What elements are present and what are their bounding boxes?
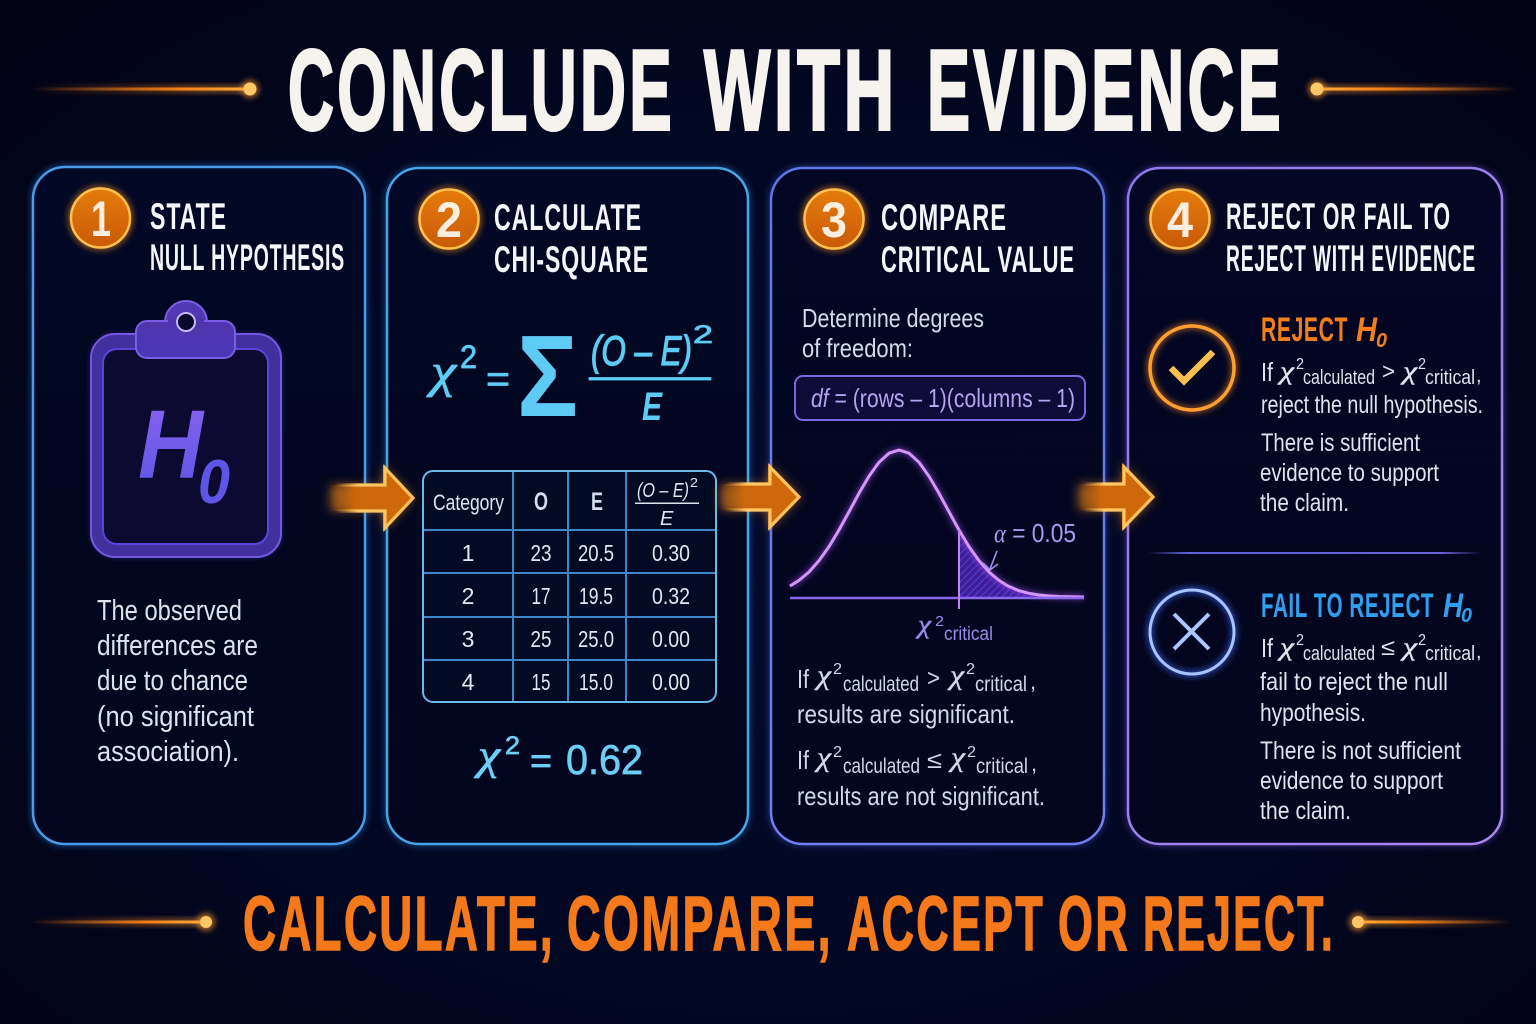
table rows: 25 bbox=[530, 626, 552, 652]
title decoration: left line bbox=[30, 80, 259, 98]
reject heading: REJECT bbox=[1261, 311, 1348, 349]
reject condition: 2 bbox=[1296, 356, 1304, 373]
table rows: 25.0 bbox=[578, 626, 614, 652]
fail to reject condition: critical bbox=[1425, 643, 1475, 665]
fail to reject condition: χ bbox=[1400, 634, 1418, 661]
fail to reject condition: calculated bbox=[1303, 643, 1375, 665]
chi-square table bbox=[423, 471, 716, 702]
footer tagline: CALCULATE, bbox=[243, 881, 555, 967]
fail to reject evidence text: evidence to support bbox=[1260, 767, 1443, 795]
chi-square formula: χ bbox=[426, 345, 458, 398]
table rows: 0.00 bbox=[652, 669, 690, 695]
reject condition: If bbox=[1261, 357, 1274, 387]
step 1 heading: NULL HYPOTHESIS bbox=[150, 237, 345, 278]
fail to reject heading: H bbox=[1443, 587, 1464, 625]
table rows: 2 bbox=[462, 583, 474, 609]
fail to reject condition: 2 bbox=[1418, 632, 1426, 649]
title bbox=[288, 28, 1284, 154]
icon: check mark bbox=[1150, 326, 1234, 410]
chi-square result: 0.62 bbox=[566, 736, 643, 783]
footer tagline: REJECT. bbox=[1143, 881, 1335, 967]
chi-square formula: 2 bbox=[693, 321, 713, 349]
table rows: 3 bbox=[462, 626, 474, 652]
df formula box bbox=[795, 376, 1085, 420]
table rows: 15.0 bbox=[579, 669, 613, 695]
fail to reject condition: fail to reject the null bbox=[1260, 668, 1448, 696]
icon: clipboard with H0: H bbox=[138, 390, 205, 499]
step 1 badge: 1 bbox=[91, 191, 111, 247]
footer tagline: ACCEPT bbox=[847, 881, 1045, 967]
significance rule: greater: 2 bbox=[966, 661, 975, 678]
icon: x mark bbox=[1150, 590, 1234, 674]
fail to reject condition: hypothesis. bbox=[1260, 699, 1366, 727]
reject heading: H bbox=[1356, 311, 1378, 349]
icon: clipboard with H0 bbox=[91, 301, 281, 557]
significance rule: less or equal: If bbox=[797, 745, 810, 775]
degrees of freedom text: of freedom: bbox=[802, 333, 913, 363]
footer decoration: left line bbox=[30, 913, 215, 931]
reject heading: 0 bbox=[1376, 330, 1387, 352]
step 3 badge bbox=[801, 186, 867, 252]
significance rule: greater: critical bbox=[975, 673, 1027, 696]
fail to reject heading: 0 bbox=[1461, 605, 1472, 627]
significance rule: greater: χ bbox=[946, 660, 965, 690]
reject evidence text: evidence to support bbox=[1260, 459, 1439, 487]
significance rule: greater: If bbox=[797, 664, 810, 694]
significance rule: greater bbox=[797, 660, 1036, 729]
table header bbox=[433, 475, 699, 530]
degrees of freedom text bbox=[802, 303, 984, 363]
table header: E bbox=[660, 508, 674, 530]
fail to reject evidence text bbox=[1260, 737, 1461, 825]
significance rule: greater: χ bbox=[813, 660, 832, 690]
arrow: step 2 to step 3 bbox=[720, 464, 801, 530]
table header: (O – E) bbox=[637, 480, 689, 502]
significance rule: greater: 2 bbox=[833, 661, 842, 678]
arrow: step 3 to step 4 bbox=[1078, 464, 1155, 530]
reject condition: critical bbox=[1425, 367, 1475, 389]
chi-square formula: = bbox=[486, 359, 510, 401]
step 4 badge bbox=[1147, 186, 1213, 252]
fail to reject condition: χ bbox=[1277, 634, 1295, 661]
significance rule: less or equal: χ bbox=[947, 742, 966, 772]
step 1 text bbox=[97, 595, 258, 768]
chi-square result: 2 bbox=[505, 732, 520, 760]
step 2 heading: CALCULATE bbox=[494, 197, 642, 238]
step 1 text: differences are bbox=[97, 630, 258, 662]
table rows: 0.00 bbox=[652, 626, 690, 652]
significance rule: less or equal: ≤ bbox=[927, 747, 942, 774]
step 1 text: (no significant bbox=[97, 701, 254, 733]
reject evidence text: There is sufficient bbox=[1261, 429, 1420, 457]
df formula box: df = (rows – 1)(columns – 1) bbox=[811, 383, 1075, 413]
reject condition bbox=[1261, 356, 1483, 419]
step 3 heading: CRITICAL VALUE bbox=[881, 239, 1075, 280]
significance rule: less or equal: critical bbox=[976, 755, 1028, 778]
step 1 text: due to chance bbox=[97, 665, 248, 697]
title: WITH bbox=[704, 28, 898, 154]
fail to reject evidence text: the claim. bbox=[1260, 797, 1351, 825]
critical value label: critical bbox=[944, 624, 993, 645]
significance rule: less or equal: results are not significant. bbox=[797, 781, 1045, 811]
chart: chi-square distribution curve bbox=[790, 450, 1084, 609]
step 1 badge bbox=[68, 185, 134, 251]
table rows: 17 bbox=[532, 583, 550, 609]
step 2 badge: 2 bbox=[436, 192, 462, 248]
icon: clipboard with H0: 0 bbox=[198, 448, 230, 517]
step 3 heading: COMPARE bbox=[881, 197, 1007, 238]
table rows: 15 bbox=[532, 669, 550, 695]
degrees of freedom text: Determine degrees bbox=[802, 303, 984, 333]
footer tagline: OR bbox=[1058, 881, 1130, 967]
significance rule: greater: > bbox=[927, 665, 940, 692]
panel 3: compare critical value bbox=[771, 168, 1104, 844]
title decoration: right line bbox=[1308, 80, 1517, 98]
step 1 heading: STATE bbox=[150, 196, 227, 237]
table rows: 0.30 bbox=[652, 540, 690, 566]
chi-square formula: E bbox=[642, 385, 663, 429]
chi-square result: = bbox=[530, 740, 552, 781]
step 1 heading bbox=[150, 196, 345, 278]
step 1 text: The observed bbox=[97, 595, 242, 627]
significance rule: less or equal: 2 bbox=[833, 744, 842, 761]
significance rule: less or equal: , bbox=[1031, 751, 1037, 776]
panel 2: calculate chi-square bbox=[387, 168, 748, 844]
table rows: 0.32 bbox=[652, 583, 690, 609]
reject condition: χ bbox=[1400, 358, 1418, 385]
reject condition: , bbox=[1476, 365, 1482, 387]
critical value label bbox=[915, 610, 993, 645]
table rows: 1 bbox=[462, 540, 474, 566]
fail to reject condition: ≤ bbox=[1381, 634, 1395, 660]
step 1 text: association). bbox=[97, 736, 239, 768]
fail to reject evidence text: There is not sufficient bbox=[1260, 737, 1461, 765]
panel 4: reject or fail to reject bbox=[1128, 168, 1502, 844]
chi-square result bbox=[473, 732, 643, 783]
arrow: step 1 to step 2 bbox=[330, 465, 414, 531]
table rows: 20.5 bbox=[578, 540, 614, 566]
significance rule: greater: calculated bbox=[843, 673, 919, 696]
reject evidence text: the claim. bbox=[1260, 489, 1349, 517]
table header: Category bbox=[433, 490, 504, 515]
step 2 badge bbox=[416, 186, 482, 252]
step 2 heading bbox=[494, 197, 649, 280]
table rows bbox=[462, 540, 690, 695]
reject condition: 2 bbox=[1418, 356, 1426, 373]
table header: 2 bbox=[690, 475, 698, 490]
critical value label: χ bbox=[915, 610, 932, 639]
table header: E bbox=[591, 488, 603, 516]
significance rule: greater: , bbox=[1030, 669, 1036, 694]
step 3 badge: 3 bbox=[821, 192, 847, 248]
chi-square formula: 2 bbox=[460, 339, 477, 375]
reject condition: calculated bbox=[1303, 367, 1375, 389]
reject condition: > bbox=[1382, 358, 1395, 384]
significance rule: less or equal: calculated bbox=[843, 755, 920, 778]
step 2 heading: CHI-SQUARE bbox=[494, 239, 649, 280]
table rows: 23 bbox=[530, 540, 552, 566]
chi-square formula: (O – E) bbox=[591, 327, 692, 374]
fail to reject condition: 2 bbox=[1296, 632, 1304, 649]
significance rule: less or equal: 2 bbox=[967, 744, 976, 761]
table header: O bbox=[534, 488, 548, 516]
significance rule: less or equal bbox=[797, 742, 1045, 811]
reject evidence text bbox=[1260, 429, 1439, 517]
chi-square formula: Σ bbox=[517, 311, 578, 441]
title: CONCLUDE bbox=[288, 28, 675, 154]
significance rule: greater: results are significant. bbox=[797, 699, 1015, 729]
fail to reject condition bbox=[1260, 632, 1482, 727]
reject condition: reject the null hypothesis. bbox=[1261, 391, 1483, 419]
chi-square result: χ bbox=[473, 733, 502, 779]
fail to reject condition: If bbox=[1261, 633, 1274, 663]
step 4 heading bbox=[1226, 196, 1476, 279]
chi-square formula bbox=[426, 311, 713, 441]
step 3 heading bbox=[881, 197, 1075, 280]
table rows: 19.5 bbox=[579, 583, 613, 609]
fail to reject condition: , bbox=[1476, 641, 1482, 663]
alpha label: α = 0.05 bbox=[994, 518, 1076, 548]
footer decoration: right line bbox=[1349, 913, 1512, 931]
table rows: 4 bbox=[462, 669, 475, 695]
panel 1: state null hypothesis bbox=[33, 167, 365, 844]
critical value label: 2 bbox=[935, 613, 944, 630]
footer tagline bbox=[243, 881, 1335, 967]
step 4 badge: 4 bbox=[1167, 192, 1193, 248]
significance rule: less or equal: χ bbox=[813, 742, 832, 772]
reject condition: χ bbox=[1277, 358, 1295, 385]
footer tagline: COMPARE, bbox=[567, 881, 833, 967]
